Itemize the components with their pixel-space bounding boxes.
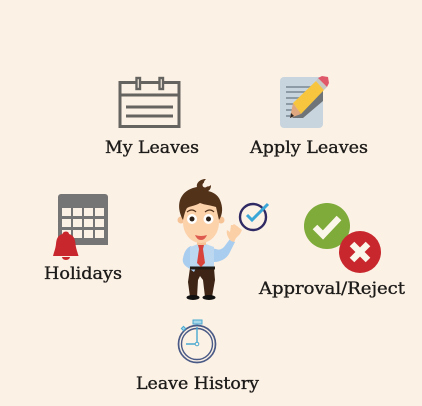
icon: holidays calendar with bell [53,194,108,260]
hair [179,179,222,220]
label: holidays: Holidays [44,264,122,283]
shirt [190,244,214,268]
eyes [187,214,197,224]
icon: apply leaves pencil and note [280,76,329,128]
hand [227,224,242,242]
tie [197,245,205,267]
right arm raised [210,239,235,262]
belt [190,266,215,270]
mouth [195,235,207,240]
icon: my leaves calendar [120,78,179,126]
label: approval/reject: Approval/Reject [258,279,405,298]
label: apply leaves: Apply Leaves [249,138,368,157]
legs [188,268,215,297]
neck [197,236,206,245]
icon: approval and reject badges [304,203,381,273]
label: my leaves: My Leaves [105,138,199,157]
face [183,200,219,243]
icon: check circle [240,204,268,230]
eyebrows [187,210,214,212]
left arm [183,246,196,272]
ears [178,216,184,224]
label: leave history: Leave History [136,374,260,393]
icon: stopwatch [178,320,216,362]
illustration: businessman waving [178,179,242,300]
